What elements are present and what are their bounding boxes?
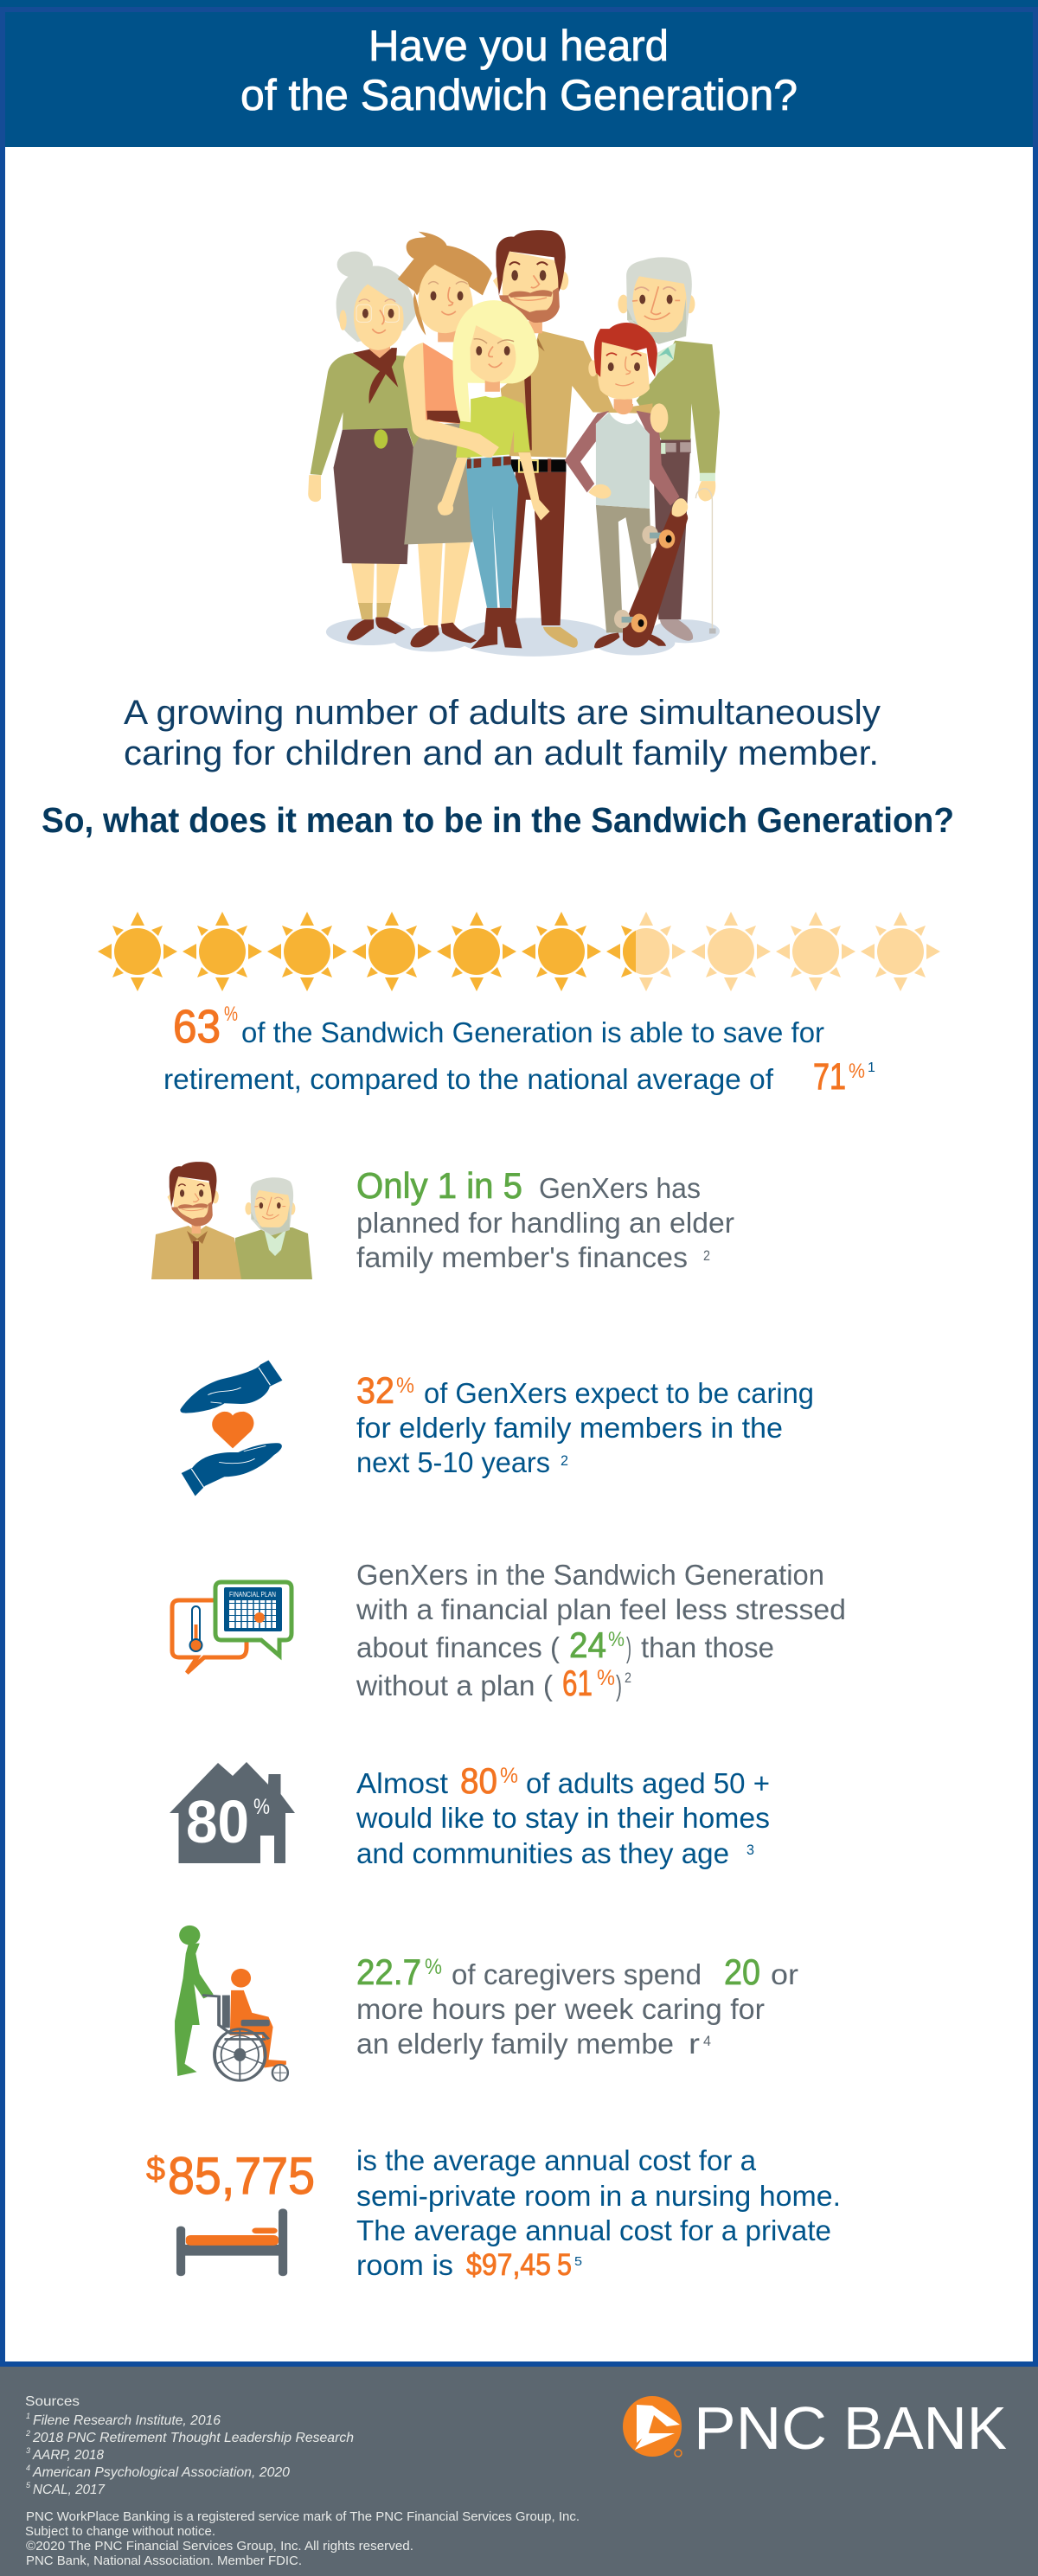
text block	[356, 1370, 814, 1478]
PNC Bank logo: PNC	[694, 2394, 827, 2462]
text block: with a financial plan feel less stressed	[356, 1593, 846, 1625]
text block: 4	[703, 2033, 711, 2049]
text block: more hours per week caring for	[356, 1993, 765, 2025]
text block: )	[626, 1631, 631, 1663]
text block: 5	[574, 2254, 582, 2269]
father hand on shoulder	[650, 403, 668, 433]
grandfather head	[618, 257, 695, 344]
text block: of caregivers spend	[452, 1958, 702, 1990]
sources list: Filene Research Institute, 2016	[33, 2413, 221, 2428]
text block: for elderly family members in the	[356, 1412, 783, 1444]
illustration: family group	[308, 230, 720, 657]
icon: two men	[151, 1162, 312, 1279]
icon: house with 80 percent: %	[253, 1795, 270, 1819]
ground shadow	[326, 618, 720, 657]
subheading: So, what does it mean to be in the Sandwich Generation?	[42, 800, 954, 840]
icon: house with 80 percent: 80	[186, 1788, 249, 1855]
text block: Almost	[356, 1767, 448, 1799]
row: only 1 in 5 GenXers	[151, 1162, 734, 1279]
text block: family member's finances	[356, 1241, 688, 1273]
sources list: AARP, 2018	[32, 2448, 104, 2463]
stat: 63 percent save for retirement	[163, 1001, 875, 1098]
grandfather	[618, 257, 720, 641]
icon: speech bubbles with calendar and thermometer: FINANCIAL PLAN	[229, 1591, 276, 1599]
sun 8	[691, 912, 771, 991]
icon: house with 80 percent	[170, 1762, 295, 1863]
text block: or	[771, 1958, 798, 1990]
text block: of GenXers expect to be caring	[424, 1377, 814, 1409]
legal text: ©2020 The PNC Financial Services Group, Inc. All rights reserved.	[26, 2539, 413, 2554]
sun 9	[776, 912, 855, 991]
icon: bed	[176, 2208, 287, 2276]
text block: next 5-10 years	[356, 1446, 550, 1478]
sources list: 3	[26, 2446, 30, 2455]
text block: room is	[356, 2249, 453, 2281]
text block: %	[597, 1666, 615, 1690]
sources list: 1	[26, 2412, 30, 2420]
footer panel	[0, 2361, 1038, 2576]
text block: an elderly family membe	[356, 2028, 674, 2060]
text block: %	[608, 1628, 625, 1651]
text block: The average annual cost for a private	[356, 2214, 831, 2246]
text block: without a plan (	[356, 1669, 553, 1701]
big number: $	[146, 2151, 165, 2188]
legal text	[25, 2509, 580, 2568]
title	[240, 22, 798, 119]
grandmother	[308, 252, 420, 641]
row: caregivers hours	[175, 1926, 798, 2081]
row: 80 percent stay in their homes	[170, 1760, 770, 1869]
text block: %	[500, 1764, 518, 1788]
stat: 63 percent save for retirement: 1	[868, 1061, 875, 1075]
sources list: 5	[26, 2481, 31, 2489]
intro text: A growing number of adults are simultaneously	[124, 694, 881, 732]
sources list: 4	[26, 2464, 30, 2472]
text block: 24	[569, 1624, 606, 1665]
text block: semi-private room in a nursing home.	[356, 2180, 841, 2212]
legal text: PNC WorkPlace Banking is a registered service mark of The PNC Financial Services Group, Inc.	[26, 2509, 580, 2524]
mother	[398, 232, 492, 647]
sun 10	[861, 912, 940, 991]
text block	[356, 2144, 841, 2282]
text block: 32	[356, 1370, 394, 1412]
sun 4	[352, 912, 432, 991]
stat: 63 percent save for retirement: of the Sandwich Generation is able to save for	[241, 1016, 824, 1048]
text block: 5	[557, 2248, 572, 2282]
text block	[356, 1559, 846, 1703]
sun 2	[183, 912, 262, 991]
sun 6	[522, 912, 601, 991]
PNC Bank logo: BANK	[843, 2394, 1007, 2462]
row: nursing home cost	[146, 2144, 841, 2282]
text block: 20	[724, 1951, 760, 1992]
row: 32 percent expect to be caring	[180, 1361, 814, 1496]
legal text: Subject to change without notice.	[25, 2524, 215, 2539]
big number: 85,775	[168, 2147, 315, 2205]
stat: 63 percent save for retirement: %	[849, 1060, 865, 1083]
text block: about finances (	[356, 1631, 560, 1663]
intro text	[124, 694, 881, 772]
icon: hands and heart	[180, 1361, 282, 1496]
intro text: caring for children and an adult family member.	[124, 734, 879, 772]
sources list: Sources	[25, 2394, 80, 2409]
sun 5	[437, 912, 516, 991]
stat: 63 percent save for retirement: 71	[813, 1056, 846, 1098]
title: of the Sandwich Generation?	[240, 71, 798, 119]
stat: 63 percent save for retirement: 63	[173, 1001, 221, 1053]
text block: planned for handling an elder	[356, 1207, 734, 1239]
text block	[356, 1760, 770, 1869]
text block: 3	[746, 1842, 754, 1858]
text block: and communities as they age	[356, 1837, 729, 1869]
text block: %	[425, 1955, 442, 1979]
text block: is the average annual cost for a	[356, 2144, 757, 2176]
wheelchair	[202, 1996, 288, 2081]
sources list: 2	[25, 2429, 30, 2438]
sun 3	[267, 912, 347, 991]
stat: 63 percent save for retirement: retirement, compared to the national average of	[163, 1063, 774, 1095]
text block: 2	[561, 1452, 568, 1469]
text block	[356, 1951, 798, 2060]
text block: r	[689, 2028, 700, 2060]
text block: 80	[460, 1760, 497, 1801]
text block: $97,45	[466, 2248, 551, 2282]
text block: 2	[625, 1669, 631, 1686]
father	[493, 230, 652, 648]
text block: GenXers has	[539, 1172, 701, 1204]
sun 7 partial	[606, 912, 686, 991]
text block: )	[616, 1669, 622, 1701]
row: financial plan stress	[172, 1559, 846, 1703]
daughter	[419, 300, 549, 649]
caregiver figure	[175, 1926, 214, 2076]
sources list: 2018 PNC Retirement Thought Leadership Research	[32, 2431, 354, 2445]
text block: %	[396, 1374, 414, 1398]
header banner	[0, 0, 1038, 147]
father head	[493, 230, 568, 333]
stat: 63 percent save for retirement: %	[224, 1003, 238, 1026]
text block: 2	[703, 1247, 710, 1264]
text block: 22.7	[356, 1951, 421, 1992]
text block: of adults aged 50 +	[526, 1767, 770, 1799]
icon: caregiver pushing wheelchair	[175, 1926, 288, 2081]
text block: GenXers in the Sandwich Generation	[356, 1559, 824, 1591]
seated person	[230, 1969, 286, 2068]
icon: speech bubbles with calendar and thermometer	[172, 1582, 292, 1673]
text block: Only 1 in 5	[356, 1165, 522, 1206]
text block: 61	[562, 1663, 593, 1703]
text block: than those	[641, 1631, 774, 1663]
PNC Bank logo	[623, 2394, 1007, 2462]
sources list	[25, 2394, 354, 2497]
grandson with skateboard	[565, 323, 688, 648]
sun 1	[98, 912, 177, 991]
sun chart: 63 percent	[98, 912, 940, 991]
sources list: NCAL, 2017	[33, 2483, 106, 2497]
text block	[356, 1165, 734, 1273]
text block: would like to stay in their homes	[356, 1802, 770, 1834]
legal text: PNC Bank, National Association. Member FDIC.	[26, 2554, 302, 2568]
title: Have you heard	[368, 22, 669, 70]
sources list: American Psychological Association, 2020	[32, 2465, 290, 2480]
